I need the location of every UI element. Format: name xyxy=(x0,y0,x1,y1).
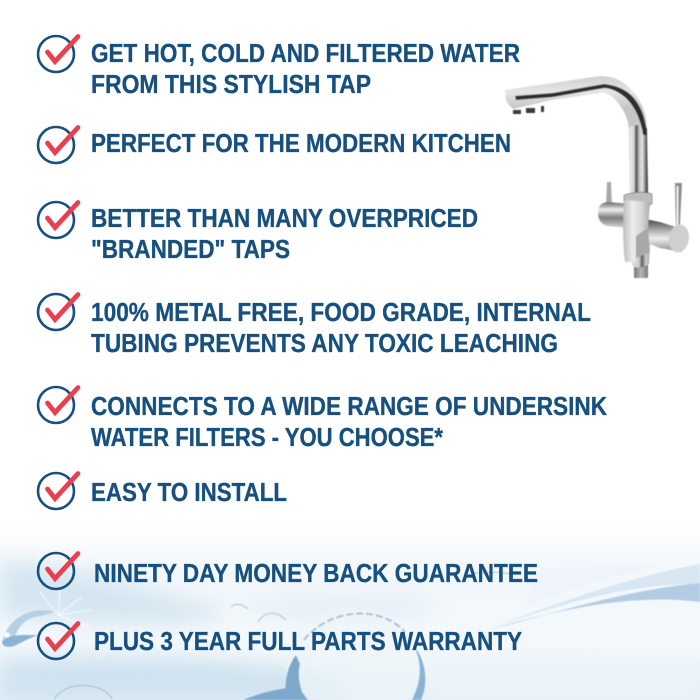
central body xyxy=(623,200,650,262)
icon: red check in blue circle xyxy=(38,36,78,72)
item 1 xyxy=(38,36,520,99)
text lines xyxy=(91,391,607,452)
icon: red check in blue circle xyxy=(38,387,78,423)
text line: NINETY DAY MONEY BACK GUARANTEE xyxy=(94,558,538,588)
spout stem xyxy=(629,125,648,195)
text lines: CONNECTS TO A WIDE RANGE OF UNDERSINK xyxy=(91,391,607,421)
text lines xyxy=(91,297,591,358)
text line: PLUS 3 YEAR FULL PARTS WARRANTY xyxy=(94,626,522,656)
spout nozzles xyxy=(513,106,544,114)
icon: red check in blue circle xyxy=(38,294,78,330)
icon: red check in blue circle xyxy=(38,202,78,238)
icon: red check in blue circle xyxy=(38,127,78,163)
text line: PERFECT FOR THE MODERN KITCHEN xyxy=(91,128,511,158)
end cap xyxy=(667,223,691,254)
text lines xyxy=(91,203,478,264)
small bubble bottom left xyxy=(54,685,112,699)
item 5 xyxy=(38,387,607,452)
hose xyxy=(634,262,648,278)
text lines xyxy=(91,38,520,99)
item 4 xyxy=(38,294,591,358)
small droplets xyxy=(231,572,510,622)
right handle xyxy=(675,183,682,237)
text line: EASY TO INSTALL xyxy=(91,477,287,507)
item 3 xyxy=(38,202,478,264)
background: water splash xyxy=(0,520,700,700)
spout xyxy=(505,76,648,195)
wave ribbon xyxy=(486,564,700,630)
item 2 xyxy=(38,127,511,163)
item 8 xyxy=(38,623,522,659)
lower body xyxy=(630,238,650,268)
left handle xyxy=(606,182,612,206)
text lines: FROM THIS STYLISH TAP xyxy=(91,69,371,99)
text lines: BETTER THAN MANY OVERPRICED xyxy=(91,203,478,233)
tap image xyxy=(505,76,691,278)
text lines: 100% METAL FREE, FOOD GRADE, INTERNAL xyxy=(91,297,591,327)
icon: red check in blue circle xyxy=(38,473,78,509)
collar xyxy=(624,192,652,207)
item 7 xyxy=(38,553,538,589)
water droplet left xyxy=(2,590,92,647)
left barrel xyxy=(598,202,630,228)
icon: red check in blue circle xyxy=(38,553,78,589)
spout highlights xyxy=(515,84,647,135)
text lines: GET HOT, COLD AND FILTERED WATER xyxy=(91,38,520,68)
item 6 xyxy=(38,473,287,509)
text lines: "BRANDED" TAPS xyxy=(91,234,290,264)
right barrel xyxy=(640,218,682,252)
large bubble xyxy=(243,606,425,700)
text lines: TUBING PREVENTS ANY TOXIC LEACHING xyxy=(91,328,558,358)
text lines: WATER FILTERS - YOU CHOOSE* xyxy=(91,422,444,452)
icon: red check in blue circle xyxy=(38,623,78,659)
